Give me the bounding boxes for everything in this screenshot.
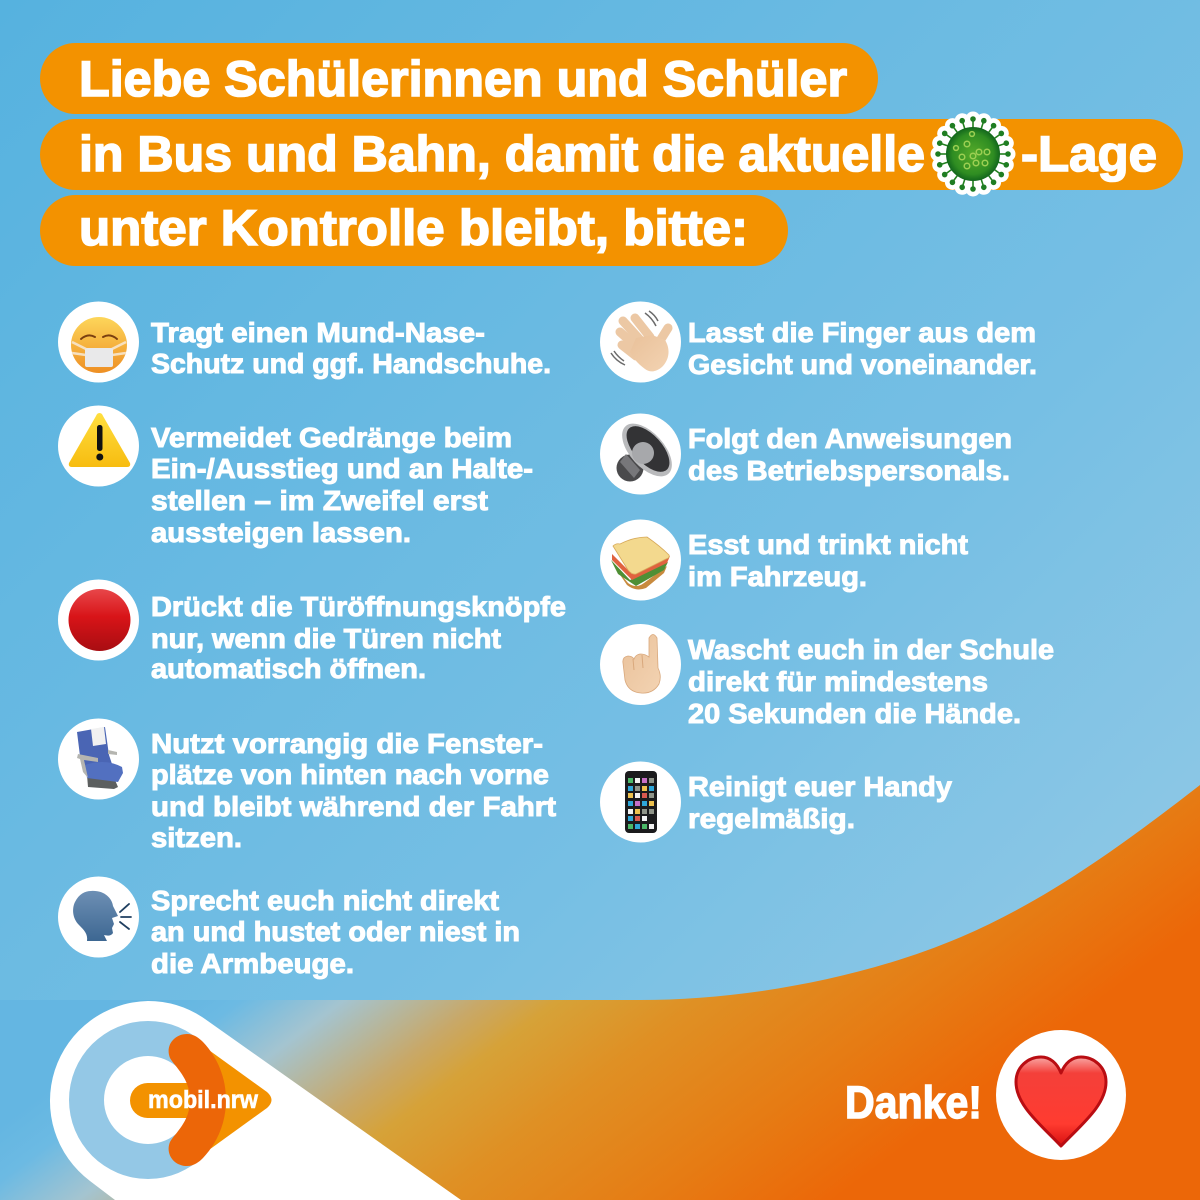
text: clean phone [688, 771, 952, 834]
icon: phone [600, 762, 681, 842]
text: crowding: stellen – im Zweifel erst [151, 485, 488, 516]
item: wash hands [600, 624, 1054, 729]
text: door button: Drückt die Türöffnungsknöpfe [151, 591, 566, 622]
text: window seats: sitzen. [151, 822, 242, 853]
icon: face with mask [58, 302, 139, 382]
text: hands off face [688, 317, 1037, 380]
text: crowding: aussteigen lassen. [151, 517, 411, 548]
text: wash hands [688, 634, 1054, 729]
icon: heart [996, 1030, 1126, 1160]
item: staff instructions [600, 414, 1012, 494]
icon: waving hand [600, 302, 681, 382]
text: door button: nur, wenn die Türen nicht [151, 623, 501, 654]
text: staff instructions: Folgt den Anweisungen [688, 423, 1012, 454]
item: crowding [58, 406, 533, 548]
text: window seats [151, 728, 556, 853]
logo white backing [50, 1001, 461, 1200]
logo arrow [195, 1040, 272, 1160]
heading line 2: -Lage [1021, 126, 1157, 182]
icon: virus [930, 111, 1016, 197]
text: cough [151, 885, 520, 979]
thanks [845, 1030, 1126, 1160]
icon: seat [58, 718, 139, 800]
item: no food [600, 520, 968, 600]
text: wash hands: direkt für mindestens [688, 666, 988, 697]
text: crowding: Vermeidet Gedränge beim [151, 422, 512, 453]
item: clean phone [600, 762, 952, 842]
logo crescent [169, 1034, 226, 1166]
text: Danke: Danke! [845, 1077, 982, 1128]
text: hands off face: Lasst die Finger aus dem [688, 317, 1036, 348]
text: crowding [151, 422, 533, 548]
heading line 3 [40, 195, 788, 266]
icon: red circle [58, 580, 139, 660]
icon: warning [58, 406, 139, 486]
text: no food: Esst und trinkt nicht [688, 529, 968, 560]
text: cough: die Armbeuge. [151, 948, 354, 979]
orange swoosh [0, 785, 1200, 1200]
logo ring [69, 1021, 227, 1179]
text: window seats: und bleibt während der Fahrt [151, 791, 556, 822]
text: mask: Schutz und ggf. Handschuhe. [151, 348, 551, 379]
text: staff instructions [688, 423, 1012, 486]
text: door button [151, 591, 566, 684]
icon: pointing finger [600, 624, 681, 705]
logo bar [130, 1083, 210, 1118]
text: window seats: Nutzt vorrangig die Fenster- [151, 728, 543, 759]
heading [40, 43, 1183, 266]
icon: sandwich [600, 520, 681, 600]
text: mask [151, 317, 551, 379]
text: no food: im Fahrzeug. [688, 561, 867, 592]
text: staff instructions: des Betriebspersonals. [688, 455, 1010, 486]
text: wash hands: 20 Sekunden die Hände. [688, 698, 1021, 729]
text: mask: Tragt einen Mund-Nase- [151, 317, 485, 348]
item: mask [58, 302, 551, 382]
text: door button: automatisch öffnen. [151, 653, 426, 684]
text: crowding: Ein-/Ausstieg und an Halte- [151, 453, 533, 484]
text: wash hands: Wascht euch in der Schule [688, 634, 1054, 665]
text: cough: Sprecht euch nicht direkt [151, 885, 499, 916]
item: window seats [58, 718, 556, 853]
text: clean phone: regelmäßig. [688, 803, 855, 834]
text: window seats: plätze von hinten nach vorne [151, 759, 549, 790]
heading line 2 [40, 119, 1183, 190]
icon: speaker [600, 414, 681, 494]
text: cough: an und hustet oder niest in [151, 916, 520, 947]
text: no food [688, 529, 968, 592]
heading line 2: in Bus und Bahn, damit die aktuelle [79, 126, 925, 182]
text: clean phone: Reinigt euer Handy [688, 771, 952, 802]
icon: speaking head [58, 876, 139, 958]
text: hands off face: Gesicht und voneinander. [688, 349, 1037, 380]
item: hands off face [600, 302, 1037, 382]
item: cough [58, 876, 520, 979]
item: door button [58, 580, 566, 684]
heading line 1: Liebe Schülerinnen und Schüler [79, 51, 847, 107]
heading line 3: unter Kontrolle bleibt, bitte: [79, 200, 748, 256]
logo: mobil.nrw [50, 1001, 461, 1200]
logo wordmark: mobil.nrw [148, 1086, 259, 1114]
